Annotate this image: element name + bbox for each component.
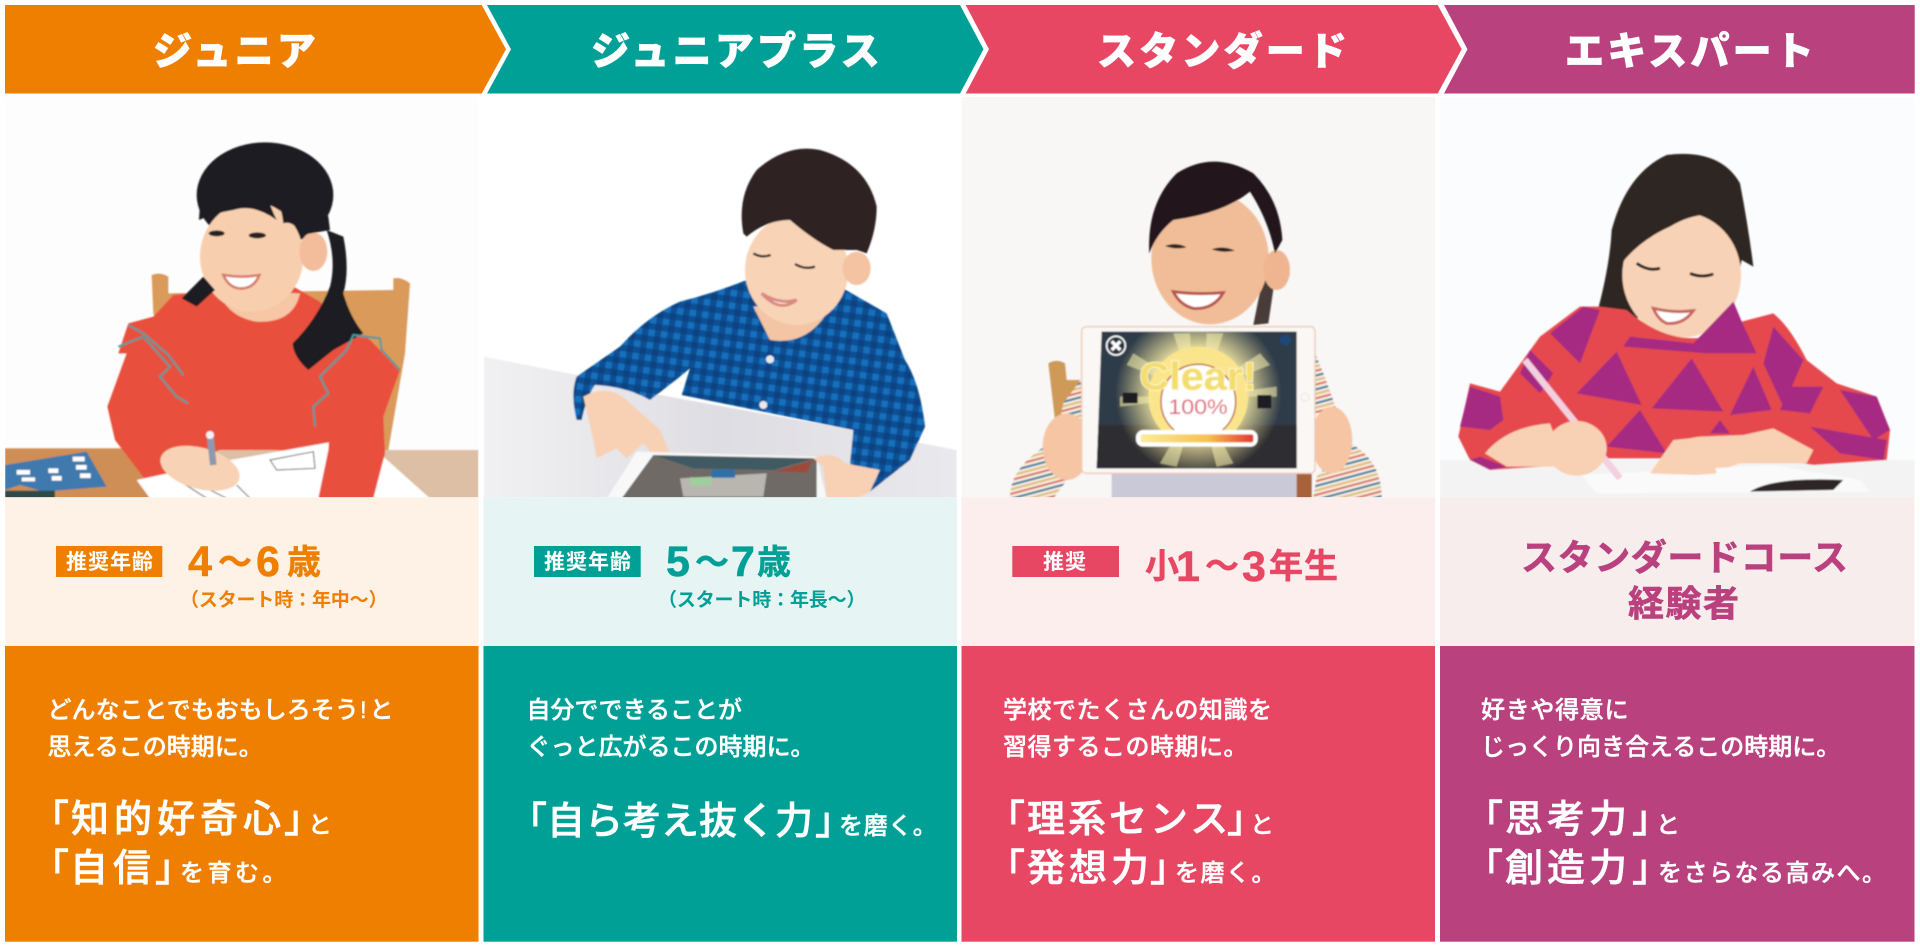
key message: 」 (1227, 799, 1265, 841)
age value: 歳 (287, 544, 321, 582)
key message: を磨く。 (839, 813, 937, 840)
requirement text: 経験者 (1628, 583, 1741, 624)
key message: 「 (31, 848, 69, 890)
heading: ジュニアプラス arrow banner: ジュニアプラス (591, 31, 883, 74)
key message: 自ら考え抜く力 (547, 801, 813, 843)
heading: ジュニア arrow banner: ジュニア (153, 31, 319, 74)
age panel: 推奨年齢 5〜7歳 (484, 497, 957, 646)
key message: と (308, 812, 332, 839)
key message: 思考力 (1505, 799, 1631, 841)
panel: ジュニア course column (5, 5, 506, 942)
age tag: 推奨年齢 (544, 551, 632, 574)
heading: スタンダード arrow banner (966, 5, 1462, 94)
age value: 歳 (757, 544, 791, 582)
key message: 「 (1465, 848, 1503, 890)
age value: 〜 (218, 544, 252, 582)
key message: を育む。 (180, 860, 290, 887)
lead text: 自分でできることが (526, 697, 742, 724)
photo: girl holding up a tablet showing Clear!: Clear! (1139, 354, 1257, 398)
heading: エキスパート arrow banner (1444, 5, 1915, 94)
age value: 〜 (695, 544, 729, 582)
age value: 7 (731, 538, 755, 586)
key message: 「 (1465, 799, 1503, 841)
key message: 」 (1632, 848, 1670, 890)
age value: 3 (1242, 543, 1266, 591)
age tag (534, 546, 641, 577)
key message: 自信 (70, 848, 156, 890)
requirement text: スタンダードコース (1521, 537, 1849, 578)
lead text: 習得するこの時期に。 (1003, 734, 1248, 761)
lead text: どんなことでもおもしろそう (48, 697, 359, 724)
key message: 創造力 (1505, 848, 1631, 890)
age value: 年 (1269, 548, 1303, 586)
key message: と (1656, 812, 1680, 839)
age value: 4 (188, 538, 212, 586)
key message: 」 (155, 848, 193, 890)
key message: 「 (31, 799, 69, 841)
photo: boy using a tablet (484, 148, 957, 498)
key message: をさらなる高みへ。 (1658, 860, 1888, 887)
age value: 〜 (1205, 548, 1239, 586)
age value: 小 (1145, 548, 1179, 586)
lead text: ! (360, 697, 367, 724)
photo: girl holding up a tablet showing Clear!: 100% (1168, 395, 1228, 419)
panel: ジュニアプラス course column (484, 5, 984, 942)
age value: 5 (666, 538, 690, 586)
age panel: 推奨 小1〜3年生 (962, 497, 1435, 646)
lead text: 好きや得意に (1481, 697, 1629, 724)
key message: と (1250, 812, 1274, 839)
heading: スタンダード arrow banner: スタンダード (1097, 30, 1350, 74)
age note: （スタート時：年中〜） (180, 588, 387, 611)
age tag (56, 546, 162, 577)
message panel: 自ら考え抜く力 (484, 646, 957, 942)
key message: 」 (1150, 848, 1188, 890)
message panel: 理系センス・発想力 (962, 646, 1435, 942)
age panel: 推奨年齢 4〜6歳 (5, 497, 478, 646)
heading: ジュニア arrow banner (5, 5, 506, 94)
panel: スタンダード course column (962, 5, 1462, 942)
key message: 」 (284, 799, 322, 841)
photo: girl writing with a pink pencil (1440, 152, 1914, 497)
age value: 1 (1176, 543, 1200, 591)
panel: スタンダードコース経験者 (1440, 497, 1914, 646)
age value: 生 (1304, 548, 1338, 586)
key message: 知的好奇心 (71, 799, 286, 841)
lead text: と (370, 697, 394, 724)
key message: 「 (987, 799, 1025, 841)
key message: 「 (987, 848, 1025, 890)
age tag (1012, 546, 1119, 577)
lead text: ぐっと広がるこの時期に。 (526, 734, 814, 761)
key message: 「 (509, 801, 547, 843)
message panel: 知的好奇心 (5, 646, 478, 942)
key message: 理系センス (1027, 799, 1231, 841)
age value: 6 (256, 538, 280, 586)
photo: girl writing in a workbook (5, 141, 478, 498)
panel: エキスパート course column (1440, 5, 1917, 942)
age note: （スタート時：年長〜） (658, 588, 865, 611)
age tag: 推奨 (1043, 551, 1087, 574)
lead text: 学校でたくさんの知識を (1003, 697, 1272, 724)
heading: ジュニアプラス arrow banner (487, 5, 984, 94)
key message: 」 (815, 801, 853, 843)
key message: を磨く。 (1175, 860, 1277, 887)
message panel: 思考力・創造力 (1440, 646, 1914, 942)
lead text: 思えるこの時期に。 (48, 734, 263, 761)
lead text: じっくり向き合えるこの時期に。 (1481, 734, 1840, 761)
key message: 発想力 (1027, 848, 1153, 890)
age tag: 推奨年齢 (66, 551, 154, 574)
heading: エキスパート arrow banner: エキスパート (1565, 31, 1817, 74)
photo: girl holding up a tablet showing Clear! (962, 97, 1435, 500)
key message: 」 (1632, 799, 1670, 841)
